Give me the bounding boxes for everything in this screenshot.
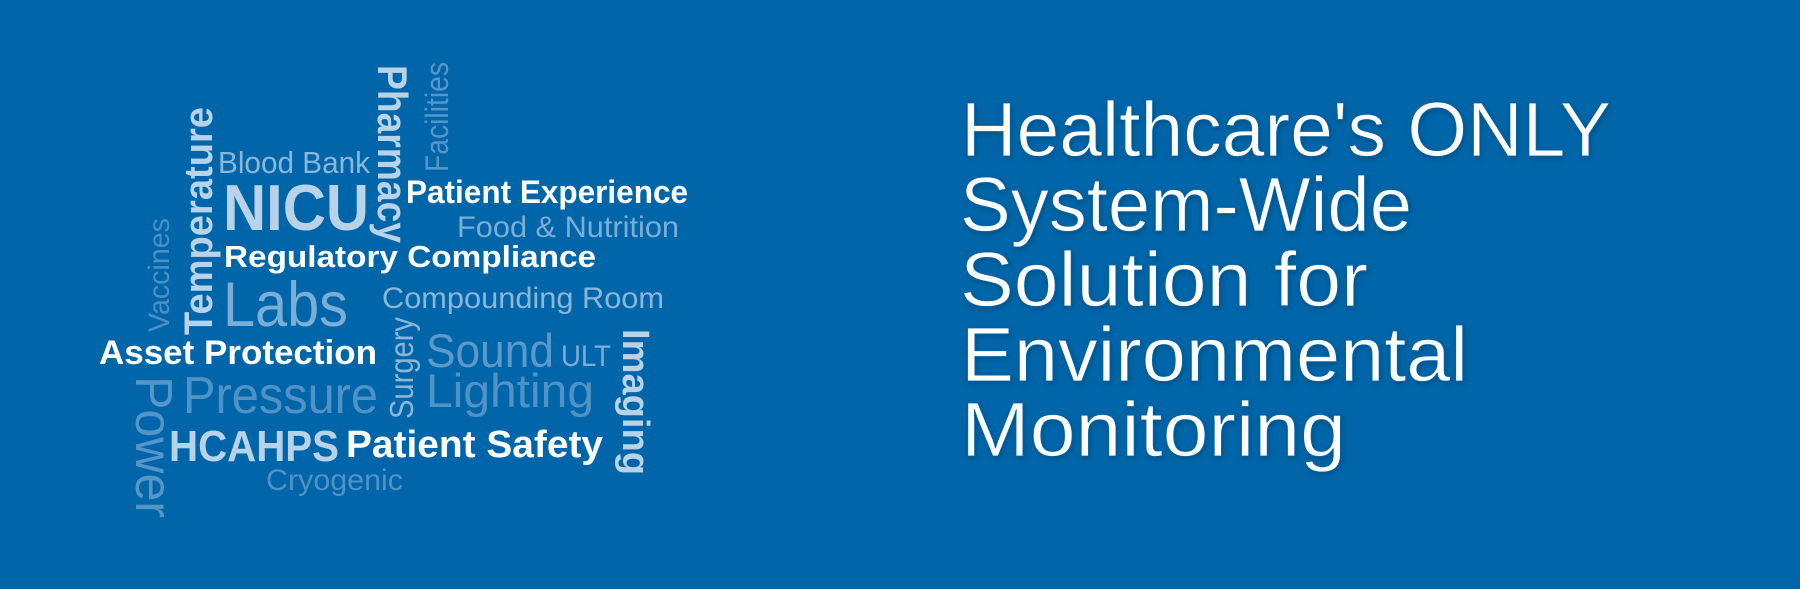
word: Temperature: Temperature [177, 107, 221, 335]
word: Surgery: Surgery [383, 317, 420, 419]
word: Blood Bank: Blood Bank [218, 145, 370, 180]
word: Patient Safety: Patient Safety [346, 424, 603, 466]
title: Environmental [961, 312, 1468, 398]
word: Asset Protection: Asset Protection [99, 334, 377, 372]
word: Compounding Room: Compounding Room [382, 282, 664, 315]
word: Imaging: Imaging [614, 329, 656, 475]
word: Food & Nutrition: Food & Nutrition [457, 211, 679, 244]
word: Labs: Labs [223, 270, 348, 340]
word: NICU: NICU [223, 171, 369, 244]
word: Patient Experience: Patient Experience [406, 174, 688, 210]
word: Vaccines: Vaccines [143, 218, 176, 332]
word: HCAHPS: HCAHPS [169, 422, 339, 471]
word: ULT: ULT [561, 340, 611, 373]
word: Cryogenic: Cryogenic [266, 464, 403, 497]
word: Regulatory Compliance: Regulatory Compliance [224, 239, 596, 274]
word: Sound: Sound [426, 324, 554, 377]
word: Pharmacy: Pharmacy [369, 65, 416, 244]
word cloud [99, 62, 688, 518]
title [960, 87, 1611, 473]
word: Power: Power [124, 376, 182, 518]
title: Monitoring [961, 387, 1346, 473]
title: Solution for [960, 237, 1368, 323]
title: System-Wide [960, 162, 1412, 248]
word: Pressure: Pressure [183, 367, 378, 425]
word: Facilities: Facilities [419, 62, 455, 172]
title: Healthcare's ONLY [961, 87, 1611, 173]
word: Lighting: Lighting [426, 364, 594, 417]
